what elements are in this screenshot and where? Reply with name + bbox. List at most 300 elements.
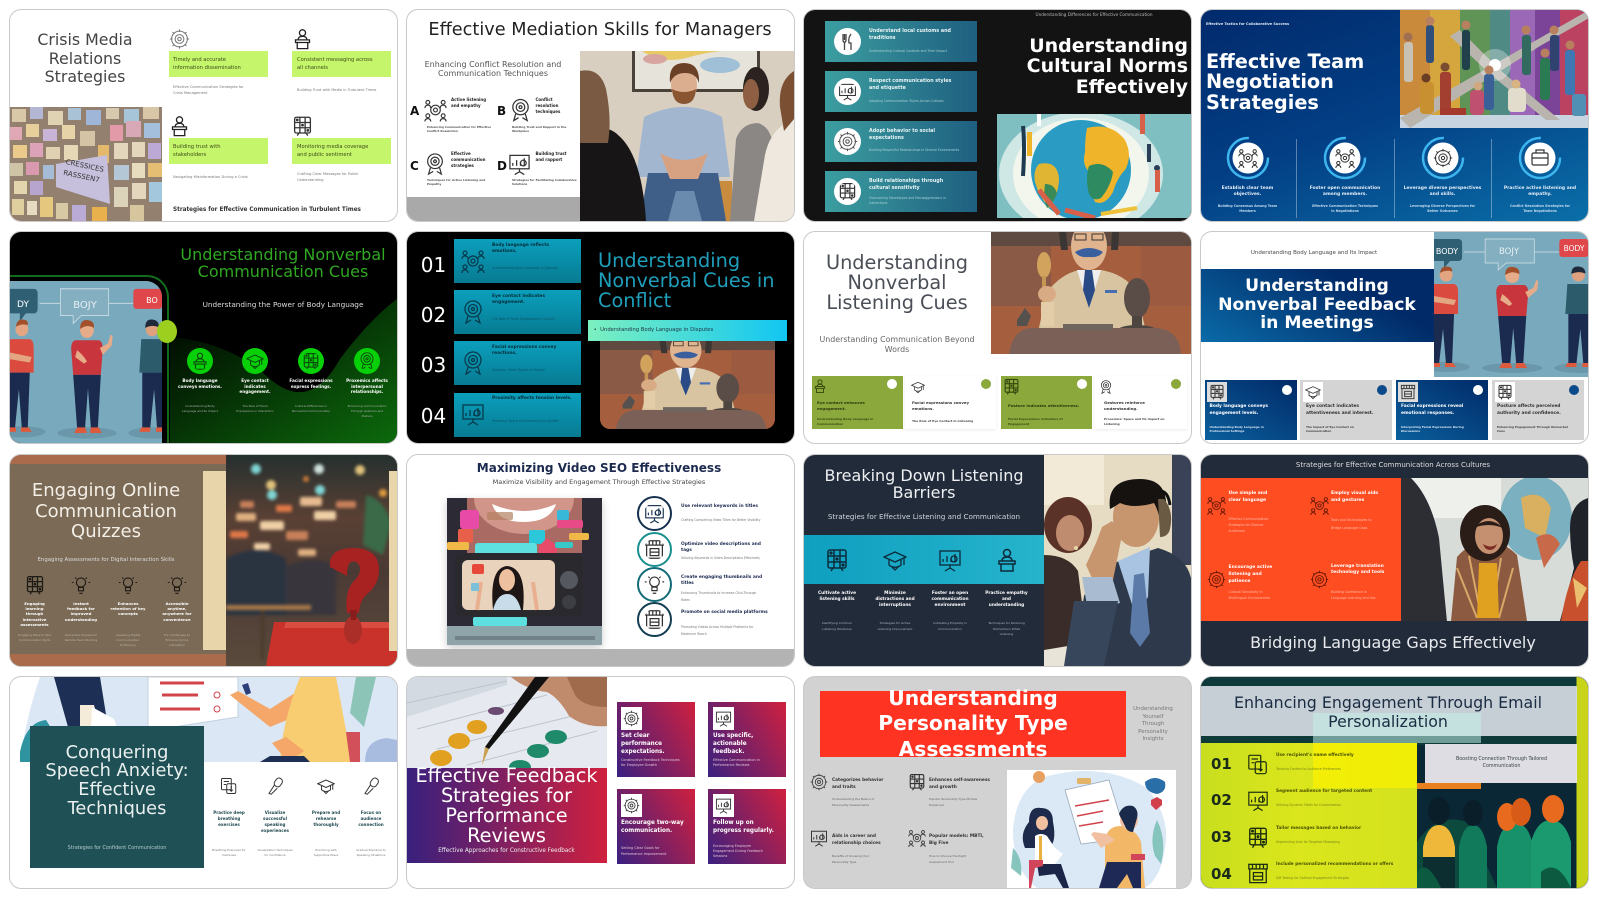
title — [45, 744, 189, 818]
icon: presentation chart — [509, 154, 530, 176]
card 3 — [617, 789, 695, 864]
badge — [1171, 379, 1181, 389]
subtext — [314, 848, 338, 858]
text: technology and tools — [1331, 570, 1384, 575]
text: learning — [25, 606, 44, 611]
text — [20, 600, 49, 628]
subtext: Distractions While — [993, 627, 1020, 631]
icon — [266, 777, 284, 795]
subtitle — [819, 335, 975, 354]
card: relationships — [825, 171, 976, 212]
cream block — [203, 471, 226, 650]
text: communication: Foster open communication — [1310, 186, 1380, 191]
subtext — [1104, 417, 1164, 426]
subtitle: Insights — [1142, 736, 1164, 742]
number 04: 04 — [421, 404, 446, 428]
subtext: Conflict Resolution Strategies for — [1510, 204, 1570, 208]
text: tags — [681, 548, 692, 553]
subtext — [512, 125, 566, 133]
subtext: The Role of Eye Contact in Listening — [912, 419, 973, 423]
subtext: for Confidence — [264, 853, 286, 857]
text: Aids in career and — [832, 834, 876, 839]
top band — [10, 455, 226, 464]
text: anywhere for — [162, 611, 192, 616]
subtext — [817, 417, 873, 426]
text: active listening: Practice active listening and — [1504, 186, 1576, 191]
text — [1228, 491, 1267, 504]
subtext — [427, 178, 485, 186]
text: diverse perspectives: Leverage diverse perspectives — [1404, 186, 1481, 191]
text: patience — [1228, 579, 1250, 584]
text: consistent messaging: all channels — [297, 65, 328, 71]
text: diverse perspectives: and skills. — [1430, 192, 1455, 197]
text: breathing — [218, 816, 240, 821]
panel: Understanding Cultural Norms Effectively — [804, 10, 1191, 221]
title: Communication Cues — [198, 262, 368, 280]
subtext: Understanding Body Language in — [817, 417, 873, 421]
title: Reviews — [467, 824, 546, 847]
text: conflict resolution — [536, 97, 560, 114]
text: consistent messaging — [297, 57, 373, 71]
text: Posture indicates attentiveness. — [1008, 403, 1079, 408]
subtext: Calmness — [222, 853, 236, 857]
title: Strategies — [1206, 91, 1319, 114]
text: Facial expressions convey — [912, 400, 969, 405]
subtext: Fun Challenges to — [164, 632, 190, 636]
title — [37, 30, 133, 86]
subtext: Rates — [681, 598, 690, 602]
title: Effective — [78, 779, 156, 800]
photo: video TV with woman — [447, 498, 602, 645]
text: Cultivate active — [818, 591, 856, 596]
title: Effectively — [1076, 76, 1188, 98]
icon: ring 3 — [1420, 136, 1464, 180]
subtext: Nonverbal Communication — [292, 409, 330, 413]
subtitle: Strategies for Confident Communication — [68, 844, 166, 850]
icon — [1247, 753, 1269, 776]
text: Gestures reinforce — [1104, 400, 1145, 405]
orange panel — [1201, 478, 1400, 621]
text: engagement levels. — [1210, 410, 1258, 416]
icon — [1207, 570, 1226, 589]
title: Engaging Online — [32, 480, 180, 501]
text: and traits — [832, 785, 856, 790]
text: local customs: traditions — [869, 36, 895, 41]
text: Body language reflects — [492, 243, 549, 248]
subtext: Cultural Sensitivity in — [1228, 590, 1263, 594]
subtext: Interpreting Facial Expressions During — [1401, 424, 1464, 428]
subtext — [1228, 590, 1270, 602]
decorative overlay: pale center — [1313, 713, 1481, 743]
text: building trust — [173, 144, 221, 158]
subtext: Speaking Situations — [357, 853, 385, 857]
text — [681, 575, 762, 587]
card 1 — [454, 239, 580, 283]
title: Effective Feedback — [415, 764, 598, 787]
subtitle: Words — [885, 344, 909, 354]
text — [1228, 564, 1272, 585]
text: relationships: cultural sensitivity — [869, 186, 920, 191]
title block — [30, 726, 204, 868]
subtitle: Understanding Communication Beyond — [819, 335, 975, 344]
text: Foster an open — [932, 591, 968, 596]
subtext: Overcoming Stereotypes and Microaggressions in — [869, 196, 946, 200]
text — [713, 819, 774, 835]
top label: Understanding Differences for Effective Communication — [1036, 12, 1152, 17]
text: Proximity affects tension levels. — [492, 396, 572, 401]
number 01: 01 — [421, 253, 446, 277]
icon — [1310, 496, 1329, 515]
subtext: Discussions — [1401, 429, 1420, 433]
subtext: Promoting Videos Across Multiple Platforms for — [681, 624, 753, 628]
illustration: body language people: BODY — [1435, 247, 1458, 256]
circle icon 2 — [637, 532, 672, 567]
subtext — [427, 125, 491, 133]
subtext — [182, 404, 218, 414]
text: effective communication: communication — [451, 157, 485, 162]
subtext: Proficiency — [120, 642, 136, 646]
title: Personality Type — [878, 711, 1068, 735]
title: Breaking Down Listening — [824, 466, 1024, 484]
subtext — [297, 172, 359, 182]
text: experiences — [261, 828, 289, 833]
text: active listening: empathy. — [1528, 192, 1552, 197]
illustration: body language frame — [10, 275, 169, 443]
subtext: Language and Its Impact — [182, 409, 218, 413]
subtext: Building Trust and Rapport in the — [512, 125, 566, 129]
icon — [1003, 378, 1020, 395]
footer strip — [407, 197, 580, 221]
text: and growth — [929, 785, 957, 790]
icon — [71, 575, 91, 595]
text: Visualize — [265, 810, 285, 815]
text: monitoring media — [297, 144, 368, 158]
icon: ring 2 — [1324, 136, 1366, 180]
top label: Strategies for Effective Communication Across Cultures — [1296, 461, 1490, 469]
subtext: Understanding Cultural Contexts and Their Impact — [869, 49, 947, 53]
title: Cultural Norms — [1027, 55, 1188, 77]
text — [110, 600, 146, 617]
text: Big Five — [929, 841, 948, 846]
subtext — [869, 196, 946, 205]
text: authority and confidence. — [1497, 410, 1561, 416]
title: Strategies for — [441, 784, 572, 807]
text — [929, 777, 990, 791]
icon — [1310, 570, 1329, 589]
icon — [810, 773, 828, 791]
subtext: Assessing Digital — [116, 632, 140, 636]
text — [162, 600, 192, 622]
text: Leverage translation — [1331, 564, 1384, 569]
icon — [1247, 862, 1269, 885]
panel: Maximizing Video SEO Effectiveness — [407, 455, 794, 666]
text: communication styles — [869, 78, 952, 91]
subtext: Listening Improvement — [878, 627, 912, 631]
icon — [810, 829, 828, 847]
text: objectives: objectives. — [1234, 192, 1261, 197]
photo: bokeh cafe and question mark — [226, 455, 397, 666]
text: consistent messaging: Consistent messaging across — [297, 57, 373, 63]
illustration: globe with people — [997, 114, 1191, 218]
icon — [362, 777, 380, 795]
badge — [1282, 385, 1292, 395]
subtext: Team Negotiations — [1523, 209, 1557, 213]
panel: Effective Team Negotiation Strategies — [1201, 10, 1588, 221]
title — [1218, 277, 1416, 332]
icon — [1495, 382, 1515, 402]
callout text — [1456, 756, 1547, 771]
title: Maximizing Video SEO Effectiveness — [477, 461, 721, 475]
subtitle: Effective Approaches for Constructive Feedback — [438, 848, 575, 854]
icon: grid circle — [834, 178, 861, 205]
subtext — [164, 632, 190, 648]
text: communication styles: Respect communication styles — [869, 79, 951, 84]
text: anytime, — [167, 606, 187, 611]
icon: ring 4 — [1518, 136, 1562, 180]
subtext: The Impact of Eye Contact on — [1306, 424, 1354, 428]
subtext — [257, 848, 293, 858]
subtext: Popular Personality Type Models — [929, 797, 977, 801]
subtext: Understanding — [297, 178, 323, 182]
photo: sticky notes wall — [10, 107, 162, 221]
card 3 — [454, 341, 580, 385]
subtext: Performance Reviews — [713, 763, 749, 767]
subtext: Proxemics: Space and Its Impact on — [1104, 417, 1164, 421]
illustration: body language people: BO — [146, 296, 158, 305]
subtext — [1331, 590, 1376, 602]
text: Eye contact enhances — [817, 400, 865, 405]
subtext: Building Trust with Media in Turbulent Times — [297, 88, 376, 92]
subtext: Multilingual Environments — [1228, 596, 1270, 600]
icon — [24, 575, 44, 595]
icon — [1247, 826, 1269, 849]
text: and — [1002, 597, 1011, 602]
text — [875, 591, 915, 609]
text: relationship choices — [832, 841, 881, 846]
subtext: Interactions — [869, 201, 887, 205]
text: Enhances self-awareness — [929, 778, 990, 783]
subtext — [173, 85, 244, 95]
card 2 — [454, 290, 580, 334]
subtext: Maximum Reach — [681, 632, 707, 636]
number 01: 01 — [1211, 755, 1232, 773]
subtitle: Yourself — [1142, 714, 1164, 720]
text — [912, 400, 969, 412]
subtitle: Engaging Assessments for Digital Interaction Skills — [37, 557, 175, 563]
subtext: Enhance Online — [166, 638, 188, 642]
subtext — [822, 621, 852, 632]
icon — [317, 777, 335, 795]
text: express feelings. — [291, 384, 331, 389]
teal band — [804, 535, 1044, 584]
subtext — [1008, 417, 1063, 426]
subtext: Segmenting Lists for Targeted Messaging — [1276, 840, 1340, 844]
icon — [461, 402, 485, 426]
subtext: Crafting Compelling Video Titles for Better Visibility — [681, 518, 760, 522]
text: Use recipient's name effectively — [1276, 753, 1354, 758]
top label: Understanding Body Language and Its Impact — [1251, 250, 1377, 256]
illustration: jungle audience — [1201, 677, 1588, 888]
icon — [994, 548, 1018, 572]
circle icon 1 — [637, 496, 672, 531]
text: local customs: Understand local customs and — [869, 29, 951, 34]
callout: building trust — [169, 138, 268, 164]
text — [713, 732, 753, 756]
callout overlay — [1425, 744, 1576, 783]
circle icon 4 — [637, 602, 672, 637]
text: feedback for — [67, 606, 95, 611]
text: communication — [1310, 186, 1380, 197]
subtext — [681, 590, 756, 604]
text: Instant — [73, 600, 89, 606]
photo: man with headphones — [1044, 455, 1191, 666]
text — [621, 732, 665, 756]
text — [931, 591, 969, 609]
text: Employ visual aids — [1331, 491, 1378, 496]
text: effective communication — [451, 151, 486, 168]
panel: Effective Mediation Skills for Managers — [407, 10, 794, 221]
subtext: Listening — [1104, 422, 1120, 426]
subtext: A/B Testing for Optimal Engagement Strategies — [1276, 876, 1349, 880]
icon — [1207, 382, 1227, 402]
text: building trust: Building trust — [536, 151, 567, 156]
text: listening skills — [819, 597, 855, 602]
text: Practice empathy — [985, 591, 1028, 596]
title: Performance — [445, 804, 568, 827]
subtext — [18, 632, 51, 642]
subtext — [929, 854, 966, 865]
icon — [1099, 378, 1113, 396]
subtext: Enhancing Engagement Through Nonverbal — [1497, 424, 1568, 428]
title: Conquering — [66, 742, 168, 762]
panel: Enhancing Engagement Through Email Personalization — [1201, 677, 1588, 888]
text: interpersonal — [351, 384, 383, 389]
icon: chart circle — [834, 78, 861, 105]
footer heading: Strategies for Effective Communication in Turbulent Times — [173, 207, 361, 213]
text: engagement. — [817, 406, 846, 411]
text: progress regularly. — [713, 828, 774, 834]
text: understanding — [65, 617, 97, 622]
title: Speech Anxiety: — [45, 760, 189, 781]
text: relationships: Build relationships through — [869, 179, 943, 184]
icon: podium speaker — [294, 29, 310, 50]
title — [1234, 692, 1542, 730]
icon — [813, 377, 827, 395]
subtext: Communication — [117, 638, 139, 642]
title: in Meetings — [1260, 313, 1374, 333]
title: Assessments — [899, 737, 1047, 761]
text: Encourage two-way — [621, 820, 684, 826]
badge — [981, 379, 991, 389]
text: Focus on — [361, 810, 381, 815]
title: Communication — [35, 500, 177, 522]
text — [492, 345, 556, 357]
text: conflict resolution: Conflict — [536, 97, 553, 102]
subtext — [1312, 204, 1378, 214]
text: timely information — [173, 57, 241, 71]
letter A: A — [410, 104, 419, 118]
highlight bar: • Understanding Body Language in Disputes — [594, 327, 713, 333]
title — [415, 766, 598, 846]
subtext: Strategies for Facilitating Collaborative — [512, 178, 577, 182]
divider — [1394, 139, 1395, 218]
subtext: Personality Type — [832, 860, 856, 864]
subtext: Performance Improvement — [621, 852, 666, 856]
top label: Effective Tactics for Collaborative Success — [1206, 22, 1289, 26]
subtext: Building Consensus Among Team — [1218, 204, 1277, 208]
text — [817, 400, 865, 412]
card 2 — [1300, 380, 1392, 440]
text: emotions. — [492, 249, 517, 254]
panel: Breaking Down Listening Barriers — [804, 455, 1191, 666]
text: Minimize — [884, 591, 906, 596]
text: conflict resolution: techniques — [536, 109, 560, 114]
number 03: 03 — [1211, 828, 1232, 846]
text: interactive — [23, 617, 46, 622]
text — [985, 591, 1028, 609]
text — [1104, 400, 1145, 412]
subtext — [929, 797, 977, 808]
subtext: Proximity, Space and Its Impact on Conflict — [492, 419, 559, 423]
text: communication. — [621, 828, 672, 834]
icon — [461, 249, 485, 273]
subtext: Members — [1239, 209, 1256, 213]
text: active listening — [1504, 186, 1576, 198]
subtext: Effective Communication in — [713, 758, 760, 762]
footer strip — [407, 649, 794, 666]
text: clear language — [1228, 498, 1266, 503]
title: Understanding — [1029, 34, 1188, 56]
text: Posture affects perceived — [1497, 404, 1560, 409]
title: Understanding — [1245, 276, 1389, 296]
text: monitoring media: and public sentiment — [297, 152, 352, 158]
card 1 — [812, 376, 903, 429]
text — [492, 294, 545, 306]
subtext: Strategies for Active — [880, 621, 910, 625]
subtext: Listening Obstacles — [822, 627, 852, 631]
text: building trust — [536, 151, 567, 162]
text: Eye contact — [241, 378, 269, 383]
subtext: Assessment Tool — [929, 860, 954, 864]
panel: Crisis Media Relations Strategies — [10, 10, 397, 221]
text: Body language — [182, 378, 218, 383]
divider — [1296, 139, 1297, 218]
subtext: Building Respectful Relationships in Diverse Environments — [869, 148, 959, 152]
subtitle: Personality — [1138, 729, 1168, 735]
text: Include personalized recommendations or offers — [1276, 862, 1393, 867]
text: understanding — [989, 603, 1024, 608]
title: Negotiation — [1206, 70, 1334, 93]
card 4 — [1095, 376, 1187, 429]
text — [239, 378, 271, 395]
panel: Conquering Speech Anxiety — [10, 677, 397, 888]
letter B: B — [497, 104, 506, 118]
subtitle — [425, 60, 561, 78]
icon circle: eye contact — [242, 348, 268, 374]
text — [681, 542, 761, 554]
subtext — [621, 758, 680, 768]
text: engagement. — [239, 389, 271, 394]
lime panel — [1201, 743, 1417, 888]
subtext: Crafting Clear Messages for Public — [297, 172, 359, 176]
icon — [909, 380, 927, 394]
subtext — [1497, 424, 1568, 434]
text: interruptions — [879, 603, 911, 608]
subtext: Conflict Resolution — [427, 129, 458, 133]
text: diverse perspectives — [1404, 186, 1481, 198]
text: Popular models: MBTI, — [929, 834, 984, 839]
text: performance — [621, 741, 662, 747]
